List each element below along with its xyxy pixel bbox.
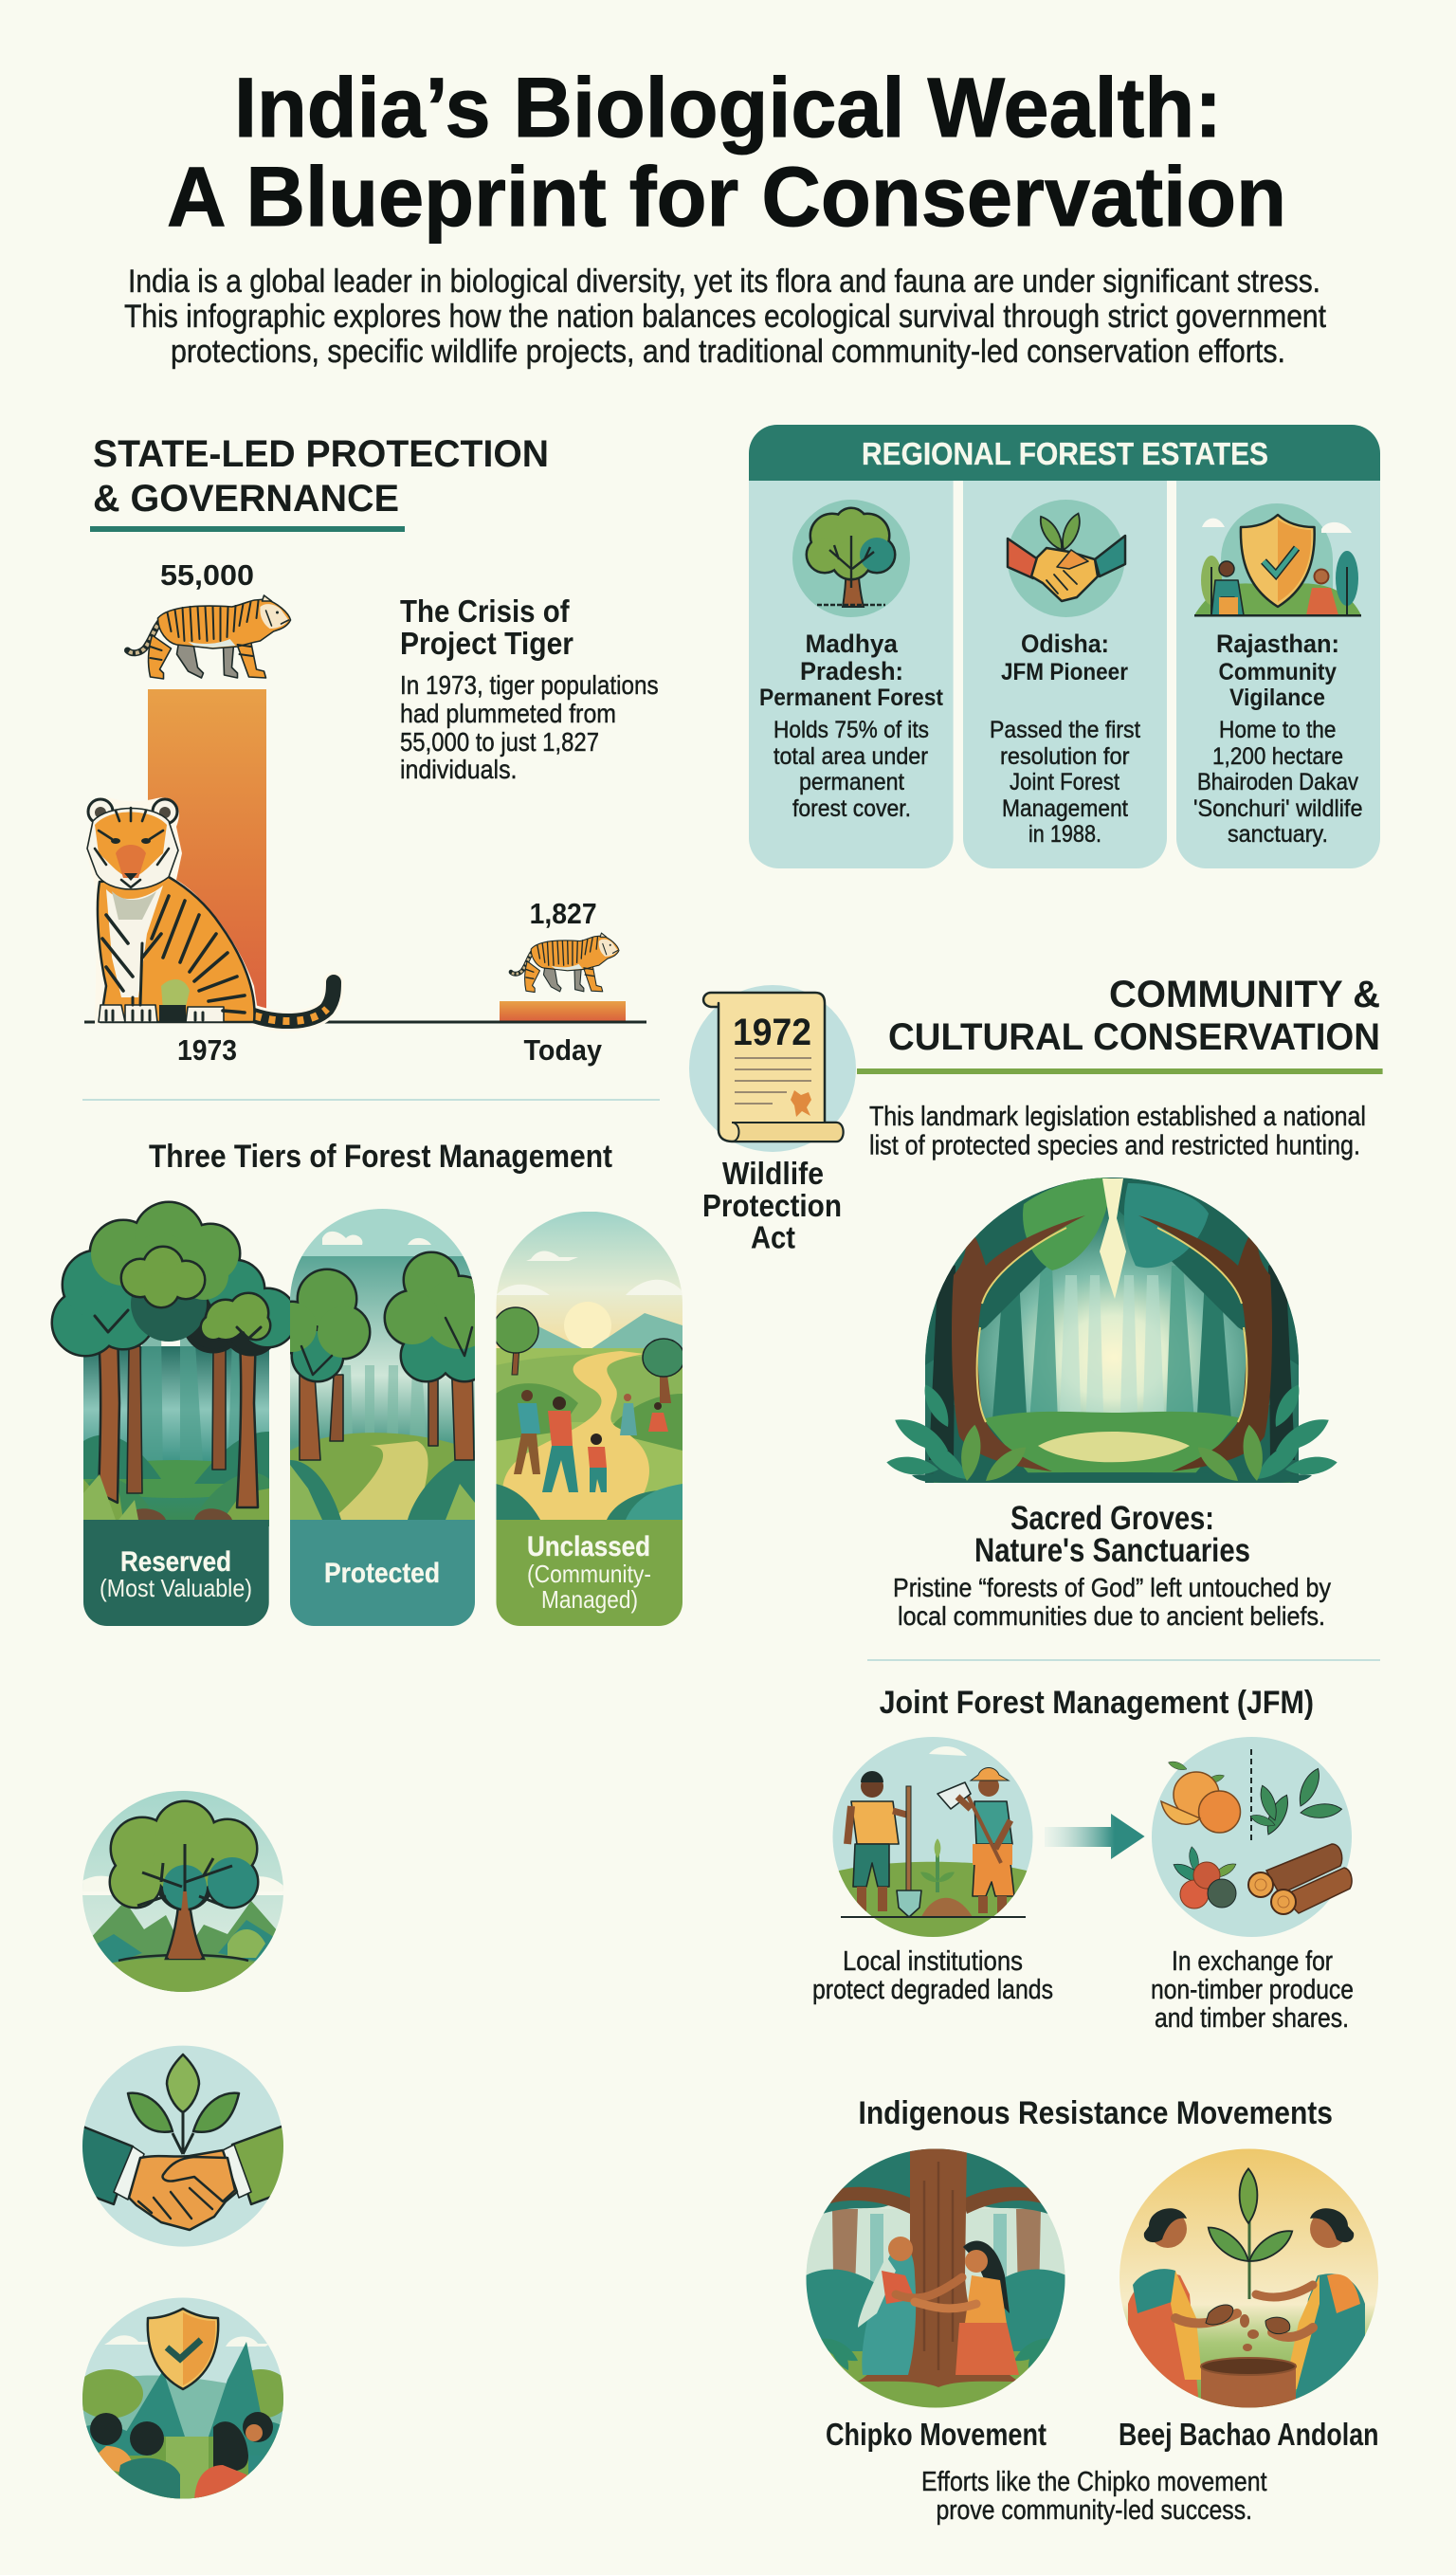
- label: unclassed: Unclassed: [527, 1531, 650, 1562]
- text block: crisis of project tiger: had plummeted from: [400, 699, 616, 728]
- column 1 text: Madhya: [806, 630, 899, 658]
- divider left: [82, 1099, 660, 1101]
- column 3 text: 1,200 hectare: [1212, 743, 1343, 770]
- column 2 text: Odisha:: [1021, 630, 1109, 658]
- illustration: dense forest: [53, 1203, 296, 1526]
- panel: protected forest: [290, 1209, 475, 1626]
- label: reserved: (Most Valuable): [100, 1574, 252, 1602]
- column 3 text: sanctuary.: [1228, 821, 1328, 848]
- text block: sacred groves: [893, 1500, 1331, 1631]
- text block: crisis of project tiger: Project Tiger: [400, 626, 573, 661]
- heading: community and cultural conservation: [857, 974, 1383, 1074]
- text block: sacred groves: Nature's Sanctuaries: [974, 1532, 1250, 1569]
- label: protected: [290, 1520, 475, 1626]
- icon: walking tiger large: [127, 595, 290, 679]
- icon: large handshake circle: [76, 2046, 289, 2247]
- text block: wildlife act description: [869, 1102, 1366, 1160]
- scroll document: [703, 993, 844, 1141]
- text block: crisis of project tiger: individuals.: [400, 755, 518, 784]
- caption: local institutions: Local institutions: [843, 1946, 1023, 1977]
- text block: crisis of project tiger: 55,000 to just 1,827: [400, 727, 599, 757]
- text block: crisis of project tiger: [400, 594, 659, 784]
- heading: state-led protection: [90, 433, 549, 532]
- bar chart: tiger population: [84, 558, 646, 1067]
- column 3 text: Rajasthan:: [1216, 630, 1339, 658]
- text block: crisis of project tiger: The Crisis of: [400, 594, 570, 629]
- icon: large tree circle: [81, 1787, 285, 1996]
- year: 1972: [733, 1012, 811, 1053]
- intro paragraph: India is a global leader in biological diversity, yet its flora and fauna are under significant stress.: [128, 264, 1320, 300]
- column 2 background: [963, 474, 1167, 868]
- text block: crisis of project tiger: In 1973, tiger populations: [400, 670, 659, 700]
- column 1 text: Holds 75% of its: [774, 717, 929, 743]
- heading: three tiers: Three Tiers of Forest Management: [149, 1139, 612, 1175]
- column 3 background: [1176, 474, 1380, 868]
- title: India’s Biological Wealth:: [234, 60, 1222, 155]
- column 1 text: Pradesh:: [800, 657, 903, 685]
- label: unclassed: [497, 1520, 682, 1626]
- label: chipko movement: Chipko Movement: [826, 2417, 1046, 2452]
- icon: community shield circle: [75, 2298, 291, 2503]
- label: beej bachao andolan: Beej Bachao Andolan: [1119, 2417, 1378, 2452]
- label: reserved: [83, 1520, 269, 1626]
- column 2 text: JFM Pioneer: [1001, 659, 1128, 685]
- panel: reserved forest: [53, 1203, 296, 1626]
- column 3 text: Home to the: [1219, 717, 1337, 743]
- column 1 text: total area under: [774, 743, 928, 770]
- caption: community-led success: [921, 2467, 1266, 2526]
- panel header: REGIONAL FOREST ESTATES: [862, 436, 1268, 471]
- heading: joint forest management: Joint Forest Management (JFM): [880, 1685, 1314, 1721]
- act name: Wildlife: [722, 1156, 824, 1191]
- icon: 1972 scroll with act name: Protection: [702, 1188, 842, 1223]
- icon: handshake: [1008, 500, 1125, 617]
- column 1 text: Permanent Forest: [759, 685, 944, 711]
- icon: tree: [792, 500, 910, 617]
- panel: unclassed forest: [493, 1212, 684, 1626]
- column 3 text: Community: [1219, 659, 1337, 685]
- column 3 text: [1193, 630, 1363, 848]
- column 1 text: forest cover.: [792, 795, 911, 822]
- illustration: open forest with path: [290, 1209, 475, 1520]
- heading: state-led protection: STATE-LED PROTECTION: [93, 433, 549, 475]
- column 3 text: 'Sonchuri' wildlife: [1193, 795, 1363, 822]
- caption: local institutions: [812, 1946, 1053, 2005]
- text block: wildlife act description: This landmark legislation established a national: [869, 1102, 1366, 1132]
- heading: community and cultural conservation: COMMUNITY &: [1109, 974, 1380, 1015]
- panel: regional forest estates: [749, 425, 1380, 868]
- text block: wildlife act description: list of protected species and restricted hunting.: [869, 1130, 1360, 1160]
- illustration: people on village path: [493, 1212, 684, 1524]
- label: 1973: 1973: [177, 1033, 237, 1067]
- column 1 text: permanent: [799, 769, 904, 795]
- label: today: Today: [523, 1033, 603, 1067]
- icon: people planting: [832, 1737, 1033, 1939]
- panel header: [749, 425, 1380, 481]
- column 1 text: [759, 630, 944, 822]
- illustration: sacred grove: [885, 1176, 1338, 1488]
- label: unclassed: Managed): [541, 1585, 638, 1614]
- arrow: [1045, 1814, 1145, 1859]
- caption: in exchange: non-timber produce: [1151, 1975, 1354, 2005]
- caption: local institutions: protect degraded lands: [812, 1975, 1053, 2005]
- column 2 text: [990, 630, 1140, 848]
- icon: shield with guardians: [1194, 503, 1361, 616]
- bar: today: [500, 1001, 626, 1022]
- axis: [84, 1020, 646, 1024]
- illustration: beej bachao andolan: [1119, 2148, 1378, 2413]
- heading: indigenous resistance: Indigenous Resistance Movements: [859, 2095, 1333, 2131]
- caption: community-led success: prove community-led success.: [937, 2495, 1252, 2526]
- icon: 1972 scroll with act name: Act: [751, 1219, 795, 1255]
- divider right: [867, 1659, 1380, 1661]
- column 2 text: Passed the first: [990, 717, 1140, 743]
- caption: in exchange: In exchange for: [1172, 1946, 1333, 1977]
- caption: in exchange: [1151, 1946, 1354, 2034]
- icon: walking tiger small: [511, 933, 619, 993]
- intro paragraph: protections, specific wildlife projects, and traditional community-led conservation efforts.: [171, 334, 1285, 370]
- column 2 text: Joint Forest: [1010, 769, 1119, 795]
- value: 55,000: 55,000: [160, 558, 254, 592]
- illustration: chipko movement: [801, 2145, 1071, 2413]
- text block: sacred groves: Pristine “forests of God” left untouched by: [893, 1573, 1331, 1602]
- icon: forest produce: [1152, 1737, 1352, 1937]
- caption: in exchange: and timber shares.: [1155, 2003, 1349, 2034]
- heading: community and cultural conservation: CULTURAL CONSERVATION: [888, 1016, 1380, 1058]
- column 3 text: Bhairoden Dakav: [1197, 769, 1358, 795]
- column 2 text: resolution for: [1000, 743, 1130, 770]
- label: unclassed: (Community-: [527, 1560, 651, 1588]
- title: A Blueprint for Conservation: [167, 149, 1286, 244]
- column 2 text: in 1988.: [1028, 821, 1101, 848]
- title: [167, 60, 1286, 244]
- column 2 text: Management: [1002, 795, 1128, 822]
- caption: community-led success: Efforts like the Chipko movement: [921, 2467, 1266, 2497]
- column 3 text: Vigilance: [1229, 685, 1325, 711]
- bar: 1973: [148, 689, 266, 1022]
- label: reserved: Reserved: [120, 1546, 231, 1578]
- intro paragraph: [124, 264, 1326, 370]
- text block: sacred groves: Sacred Groves:: [1010, 1500, 1214, 1537]
- column 1 background: [749, 474, 954, 868]
- heading: state-led protection: & GOVERNANCE: [93, 478, 399, 520]
- label: protected: Protected: [324, 1558, 440, 1589]
- value: 1,827: 1,827: [530, 897, 597, 930]
- text block: sacred groves: local communities due to ancient beliefs.: [898, 1601, 1325, 1631]
- icon: sitting tiger: [85, 797, 334, 1024]
- intro paragraph: This infographic explores how the nation balances ecological survival through strict government: [124, 299, 1326, 335]
- icon: 1972 scroll with act name: [689, 985, 856, 1255]
